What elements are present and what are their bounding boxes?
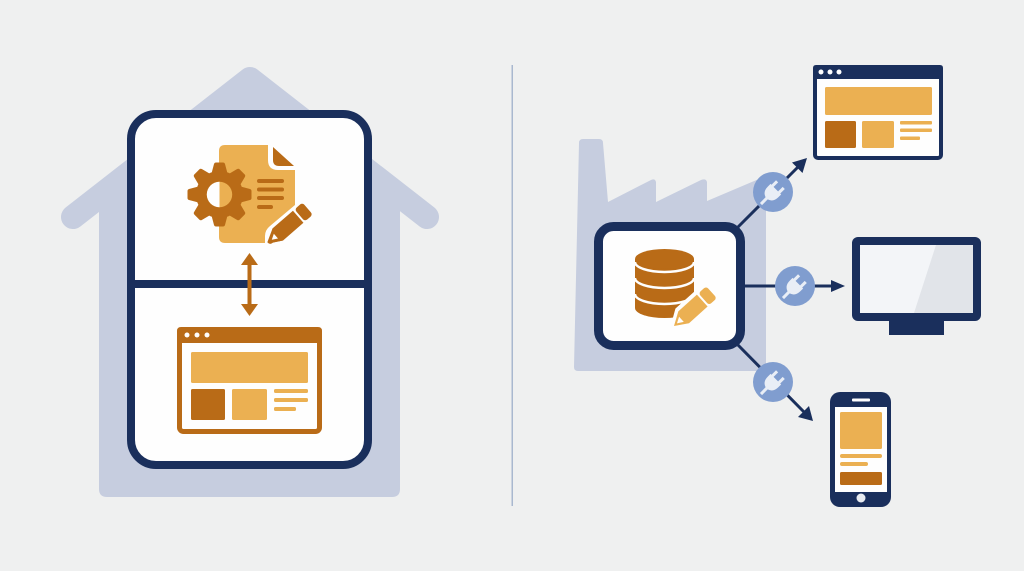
center divider: [512, 65, 513, 506]
icon: orange browser window: [177, 327, 322, 432]
icon: plug top: [745, 164, 801, 220]
content hub frame: [598, 226, 740, 346]
icon: plug bottom: [745, 354, 801, 410]
house silhouette: [73, 79, 427, 497]
icon: monitor: [852, 237, 981, 335]
connector: bottom: [738, 345, 804, 412]
panel: left monolith house: [73, 79, 427, 497]
connector: top: [738, 165, 800, 227]
arrow head: middle: [831, 280, 845, 292]
arrow: two-way vertical: [241, 253, 258, 316]
icon: navy browser window: [813, 65, 943, 158]
arrow head: top: [792, 158, 807, 173]
connector: middle: [745, 284, 834, 288]
factory silhouette: [574, 139, 766, 371]
icon: plug middle: [767, 258, 823, 314]
icon: database with pencil: [635, 249, 721, 337]
arrow head: bottom: [798, 406, 813, 421]
split application frame: [131, 114, 368, 465]
icon: smartphone: [830, 392, 891, 507]
icon: document with gear and pencil: [188, 145, 313, 249]
panel: right headless factory: [574, 65, 981, 507]
